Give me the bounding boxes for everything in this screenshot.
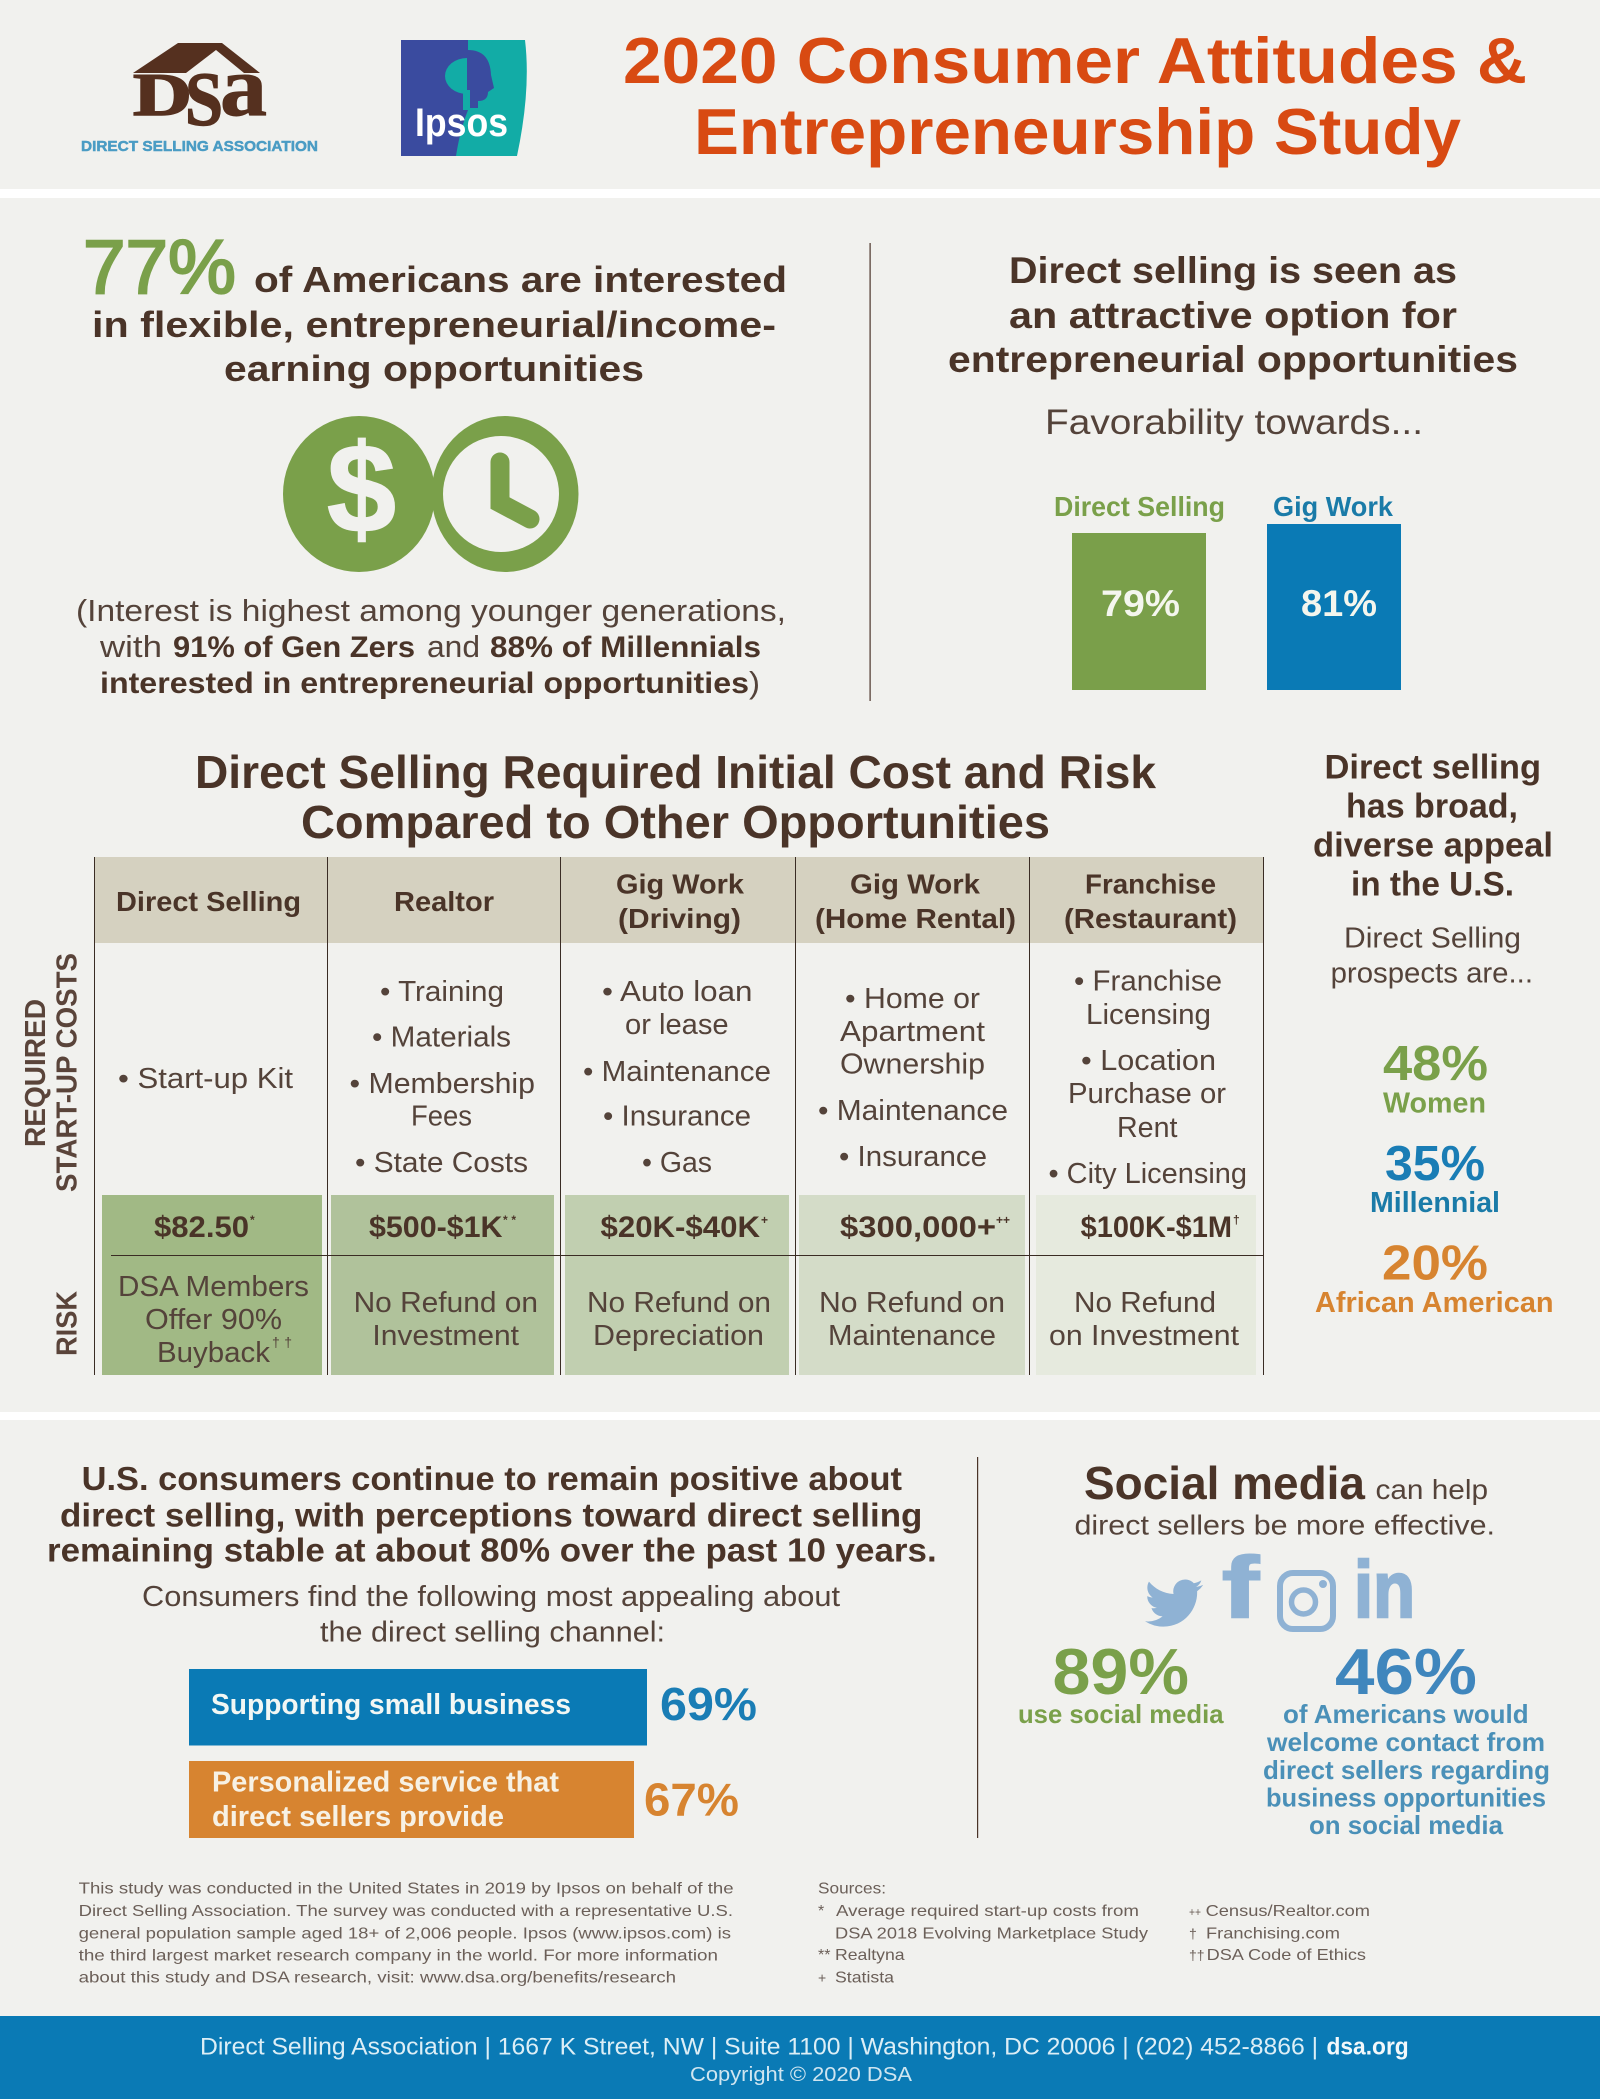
panel: social media xyxy=(1018,1457,1550,1840)
column: Direct Selling: Offer 90% xyxy=(145,1304,282,1336)
text: sources: ++ xyxy=(1189,1905,1201,1919)
bar: personalized service 67% xyxy=(189,1761,739,1838)
footer: Direct Selling Association | 1667 K Street, NW | Suite 1100 | Washington, DC 20006 | (202) 452-8866 | xyxy=(200,2034,1318,2060)
icon: linkedin: in xyxy=(1354,1545,1415,1634)
text: sources: Statista xyxy=(835,1970,894,1987)
heading: social media: direct sellers be more effective. xyxy=(1074,1510,1495,1541)
column: Direct Selling: Direct Selling xyxy=(116,886,301,917)
text: generations note: ) xyxy=(749,665,760,700)
stat: 20% African American: 20% xyxy=(1382,1236,1488,1290)
column: Realtor: • Membership xyxy=(350,1068,535,1100)
text: sources: † xyxy=(1189,1926,1197,1942)
text: study methodology: about this study and DSA research, visit: www.dsa.org/benefits/research xyxy=(79,1970,676,1987)
logo: Direct Selling Association: a xyxy=(220,38,267,134)
column: Gig Work (Home Rental): ++ xyxy=(996,1213,1010,1227)
row label: required start-up costs: REQUIRED xyxy=(20,999,52,1147)
stat: 46% welcome contact: welcome contact from xyxy=(1266,1727,1545,1757)
stat: 46% welcome contact: of Americans would xyxy=(1283,1699,1529,1729)
text: generations note: 91% of Gen Zers xyxy=(173,631,415,664)
stat: 46% welcome contact: on social media xyxy=(1309,1810,1504,1840)
column: Gig Work (Driving) xyxy=(583,868,771,1352)
heading: interest in flexible opportunities: in flexible, entrepreneurial/income- xyxy=(92,304,776,345)
bar: supporting small business 69%: 69% xyxy=(660,1678,757,1730)
heading: positive about direct selling: remaining stable at about 80% over the past 10 years. xyxy=(47,1531,937,1568)
logo: Direct Selling Association: D xyxy=(133,62,192,128)
column: Direct Selling xyxy=(116,886,309,1369)
column: Gig Work (Driving): • Maintenance xyxy=(583,1056,771,1088)
column: Gig Work (Home Rental): Maintenance xyxy=(828,1320,996,1352)
text: generations note: 88% of Millennials xyxy=(490,631,761,664)
text: generations note: interested in entrepreneurial opportunities xyxy=(100,667,749,700)
column: Direct Selling: * xyxy=(250,1213,255,1227)
heading: interest in flexible opportunities xyxy=(92,259,787,389)
column: Franchise (Restaurant) xyxy=(1048,868,1247,1352)
column: Gig Work (Home Rental): $300,000+ xyxy=(840,1211,996,1244)
title: 2020 Consumer Attitudes & xyxy=(623,24,1527,97)
text: study methodology xyxy=(79,1880,734,1987)
column: Franchise (Restaurant): • Franchise xyxy=(1074,966,1222,998)
panel: consumer perceptions xyxy=(47,1460,937,1838)
heading: attractive option: Direct selling is seen as xyxy=(1009,250,1457,291)
column: Gig Work (Home Rental): (Home Rental) xyxy=(815,903,1016,934)
footer: Copyright © 2020 DSA xyxy=(690,2064,913,2086)
column: Franchise (Restaurant): • City Licensing xyxy=(1048,1158,1247,1190)
heading: attractive option xyxy=(948,250,1518,380)
text: sources: Franchising.com xyxy=(1206,1926,1340,1942)
stat: 35% millennial: 35% xyxy=(1385,1137,1485,1191)
column: Direct Selling: $82.50 xyxy=(154,1211,249,1244)
heading: social media xyxy=(1074,1457,1495,1541)
column: Direct Selling: Buyback xyxy=(157,1337,271,1369)
icon: dollar coin: $ xyxy=(327,418,396,559)
text: prospects are: prospects are... xyxy=(1331,957,1533,989)
column: Franchise (Restaurant): Franchise xyxy=(1085,868,1216,900)
column: Realtor: ** xyxy=(503,1213,516,1227)
column: Gig Work (Driving): (Driving) xyxy=(618,903,741,934)
column: Gig Work (Home Rental): Ownership xyxy=(840,1048,985,1080)
logo: Direct Selling Association: S xyxy=(185,58,223,142)
text: generations note: and xyxy=(427,629,480,664)
stat: 46% welcome contact: 46% xyxy=(1335,1635,1477,1708)
column: Direct Selling: DSA Members xyxy=(118,1271,309,1303)
heading: positive about direct selling xyxy=(47,1460,937,1568)
stat: 46% welcome contact xyxy=(1263,1635,1550,1840)
column: Gig Work (Driving): Gig Work xyxy=(616,868,744,900)
text: study methodology: general population sample aged 18+ of 2,006 people. Ipsos (www.ipsos.com) is xyxy=(79,1926,731,1942)
heading: broad diverse appeal: has broad, xyxy=(1346,788,1518,826)
column: Gig Work (Driving): + xyxy=(761,1213,768,1227)
column: Franchise (Restaurant): • Location xyxy=(1081,1045,1216,1077)
footer xyxy=(0,2016,1600,2099)
stat: 48% women: Women xyxy=(1383,1088,1486,1120)
text: prospects are xyxy=(1331,923,1533,989)
column: Gig Work (Driving): or lease xyxy=(625,1009,729,1041)
heading: broad diverse appeal: in the U.S. xyxy=(1351,866,1514,904)
text: sources xyxy=(818,1880,1370,1987)
column: Gig Work (Driving): Depreciation xyxy=(593,1320,764,1352)
text: generations note: (Interest is highest among younger generations, xyxy=(76,593,786,628)
panel: favorability xyxy=(948,250,1518,690)
column: Direct Selling: • Start-up Kit xyxy=(118,1063,293,1095)
text: most appealing xyxy=(142,1581,840,1649)
column: Gig Work (Driving): • Auto loan xyxy=(602,976,752,1008)
text: sources: ** xyxy=(818,1947,830,1964)
heading: interest in flexible opportunities: of Americans are interested xyxy=(254,259,787,300)
stat: 46% welcome contact: business opportunities xyxy=(1266,1783,1546,1813)
column: Franchise (Restaurant): (Restaurant) xyxy=(1064,903,1237,934)
bar: personalized service 67%: 67% xyxy=(644,1774,739,1826)
column: Franchise (Restaurant): Rent xyxy=(1117,1112,1178,1144)
stat: 89% use social media xyxy=(1018,1635,1224,1729)
bar: Direct Selling 79%: Direct Selling xyxy=(1054,491,1225,522)
row label: required start-up costs: START-UP COSTS xyxy=(52,953,84,1192)
heading: broad diverse appeal xyxy=(1313,748,1553,904)
column: Franchise (Restaurant): on Investment xyxy=(1049,1320,1239,1352)
column: Franchise (Restaurant): Purchase or xyxy=(1068,1078,1226,1110)
bar: personalized service 67%: Personalized service that xyxy=(212,1766,559,1798)
heading: positive about direct selling: direct selling, with perceptions toward direct selling xyxy=(60,1497,922,1534)
text: sources: + xyxy=(818,1970,826,1986)
table header band xyxy=(94,857,1263,943)
logo: Direct Selling Association xyxy=(81,38,318,155)
column: Realtor: Realtor xyxy=(394,886,494,917)
heading: cost and risk xyxy=(195,746,1156,848)
stat: 20% African American xyxy=(1315,1236,1554,1319)
text: sources: * xyxy=(818,1903,824,1920)
column: Gig Work (Driving): $20K-$40K xyxy=(600,1211,760,1244)
stat: 35% millennial xyxy=(1370,1137,1500,1219)
column: Franchise (Restaurant): Licensing xyxy=(1086,999,1211,1031)
text: study methodology: This study was conducted in the United States in 2019 by Ipsos on behalf of the xyxy=(79,1880,734,1898)
column: Gig Work (Driving): • Insurance xyxy=(603,1100,751,1132)
logo: Direct Selling Association: DIRECT SELLING ASSOCIATION xyxy=(81,138,318,155)
heading: cost and risk: Direct Selling Required Initial Cost and Risk xyxy=(195,746,1156,798)
stat: 48% women xyxy=(1383,1037,1488,1120)
column: Gig Work (Home Rental): • Maintenance xyxy=(818,1095,1008,1127)
heading: attractive option: an attractive option for xyxy=(1009,295,1457,336)
text: study methodology: Direct Selling Association. The survey was conducted with a representative U.S. xyxy=(79,1903,733,1920)
text: sources: Sources: xyxy=(818,1880,886,1898)
column: Gig Work (Home Rental) xyxy=(815,868,1016,1352)
text: sources: †† xyxy=(1189,1947,1205,1963)
column: Realtor: Fees xyxy=(411,1100,472,1132)
text: generations note xyxy=(76,593,786,700)
logo: Ipsos: Ipsos xyxy=(415,101,508,145)
column: Franchise (Restaurant): † xyxy=(1233,1213,1240,1227)
row label: required start-up costs xyxy=(20,953,84,1192)
bar: Gig Work 81%: 81% xyxy=(1301,583,1377,624)
title: Entrepreneurship Study xyxy=(694,95,1461,168)
column: Gig Work (Home Rental): No Refund on xyxy=(819,1287,1005,1319)
column: Gig Work (Driving): • Gas xyxy=(642,1147,712,1179)
stat: 35% millennial: Millennial xyxy=(1370,1187,1500,1219)
panel: 77% interested xyxy=(76,225,787,700)
icon: twitter bird xyxy=(1145,1579,1203,1627)
column: Realtor: Investment xyxy=(372,1320,519,1352)
footer: dsa.org xyxy=(1326,2034,1409,2060)
text: study methodology: the third largest market research company in the world. For more information xyxy=(79,1947,718,1964)
text: most appealing: Consumers find the following most appealing about xyxy=(142,1581,840,1613)
text: sources: DSA Code of Ethics xyxy=(1207,1947,1366,1964)
bar: Gig Work 81% xyxy=(1267,491,1401,690)
bar: Gig Work 81%: Gig Work xyxy=(1273,491,1393,522)
column: Realtor: • Materials xyxy=(372,1022,511,1054)
stat: 48% women: 48% xyxy=(1383,1037,1488,1091)
column: Gig Work (Home Rental): Apartment xyxy=(840,1016,985,1048)
column: Realtor: $500-$1K xyxy=(369,1211,503,1244)
icon: clock xyxy=(432,416,578,572)
text: sources: DSA 2018 Evolving Marketplace Study xyxy=(835,1926,1148,1942)
column: Realtor xyxy=(350,886,538,1352)
title xyxy=(623,24,1527,168)
stat: 20% African American: African American xyxy=(1315,1287,1554,1319)
column: Gig Work (Home Rental): • Home or xyxy=(845,983,980,1015)
bar: Direct Selling 79%: 79% xyxy=(1101,583,1180,624)
heading: attractive option: entrepreneurial opportunities xyxy=(948,339,1518,380)
column: Realtor: No Refund on xyxy=(354,1287,538,1319)
column: Realtor: • Training xyxy=(380,976,504,1008)
column: Gig Work (Home Rental): • Insurance xyxy=(839,1141,987,1173)
heading: broad diverse appeal: Direct selling xyxy=(1324,748,1541,786)
stat: 77%: 77% xyxy=(83,225,236,310)
text: generations note: with xyxy=(99,629,162,664)
column: Franchise (Restaurant): $100K-$1M xyxy=(1081,1211,1232,1244)
heading: broad diverse appeal: diverse appeal xyxy=(1313,827,1553,865)
logo: Ipsos xyxy=(401,40,527,156)
bar: Direct Selling 79% xyxy=(1054,491,1225,690)
stat: 89% use social media: use social media xyxy=(1018,1699,1224,1729)
heading: social media: Social media xyxy=(1084,1457,1365,1509)
bar: personalized service 67%: direct sellers provide xyxy=(212,1801,504,1833)
icon: facebook: f xyxy=(1222,1540,1259,1636)
icon: dollar coin xyxy=(283,416,435,572)
panel: diverse appeal xyxy=(1313,748,1554,1319)
heading: cost and risk: Compared to Other Opportunities xyxy=(301,796,1050,848)
table: comparison xyxy=(94,857,1264,1375)
text: favorability towards: Favorability towards... xyxy=(1045,403,1423,442)
text: sources: Average required start-up costs from xyxy=(836,1903,1139,1920)
icon: instagram xyxy=(1280,1573,1333,1629)
column: Franchise (Restaurant): No Refund xyxy=(1074,1287,1216,1319)
text: most appealing: the direct selling channel: xyxy=(320,1617,665,1649)
column: Gig Work (Home Rental): Gig Work xyxy=(850,868,980,900)
heading: social media: can help xyxy=(1376,1474,1488,1505)
bar: supporting small business 69% xyxy=(189,1669,757,1746)
column: Realtor: • State Costs xyxy=(355,1147,528,1179)
text: sources: Census/Realtor.com xyxy=(1206,1903,1370,1920)
bar: supporting small business 69%: Supporting small business xyxy=(211,1689,571,1721)
row label: risk: RISK xyxy=(52,1291,84,1356)
column: Gig Work (Driving): No Refund on xyxy=(587,1287,771,1319)
text: prospects are: Direct Selling xyxy=(1344,923,1521,955)
column: Direct Selling: †† xyxy=(272,1334,292,1350)
stat: 46% welcome contact: direct sellers regarding xyxy=(1263,1755,1550,1785)
stat: 89% use social media: 89% xyxy=(1052,1635,1189,1708)
text: sources: Realtyna xyxy=(835,1947,905,1964)
heading: interest in flexible opportunities: earning opportunities xyxy=(224,348,644,389)
heading: positive about direct selling: U.S. consumers continue to remain positive about xyxy=(82,1460,902,1497)
